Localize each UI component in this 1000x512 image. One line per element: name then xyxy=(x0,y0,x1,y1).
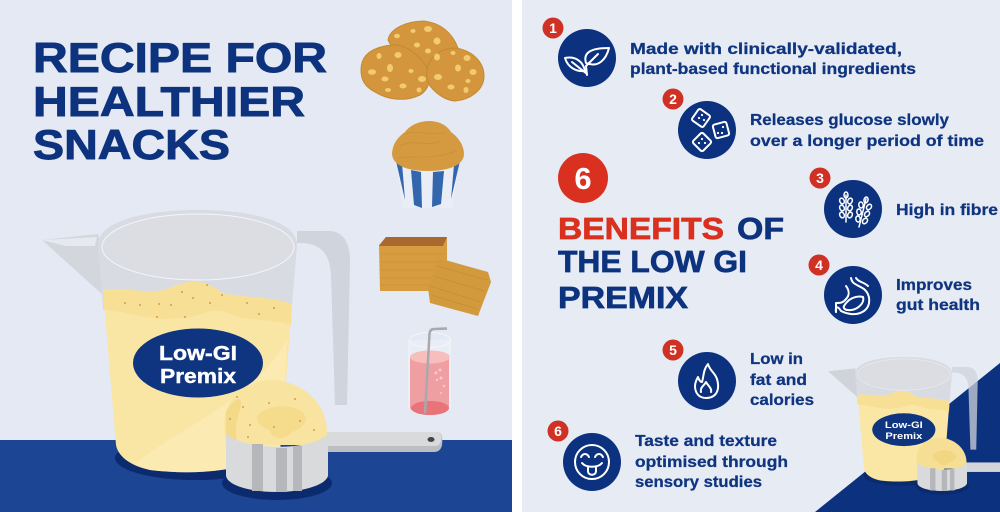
benefit 2: slow glucose release: 2 xyxy=(669,91,677,107)
icon: smiling face xyxy=(575,445,609,479)
benefit 4: gut health xyxy=(808,254,980,324)
small label: Low-GI Premix: Low-GI xyxy=(885,420,923,431)
benefit 2: slow glucose release: Releases glucose slowly xyxy=(750,112,949,129)
benefit 6: taste and texture: Taste and texture xyxy=(635,433,777,450)
small label: Low-GI Premix: Premix xyxy=(885,431,923,442)
benefit 5: low in fat and calories: Low in xyxy=(750,351,803,368)
benefit 1: plant-based ingredients: 1 xyxy=(549,20,557,36)
benefit 2: slow glucose release: over a longer period of time xyxy=(750,133,984,150)
heading: 6 benefits of the low GI premix: PREMIX xyxy=(558,280,688,315)
benefit 6: taste and texture: sensory studies xyxy=(635,474,762,491)
benefit 3: high in fibre: High in fibre xyxy=(896,202,998,219)
benefit 6: taste and texture: optimised through xyxy=(635,454,788,471)
icon: flame xyxy=(695,364,718,398)
benefit 6: taste and texture xyxy=(548,420,788,491)
benefit 1: plant-based ingredients xyxy=(542,18,916,87)
heading: 6 benefits of the low GI premix: OF xyxy=(737,211,784,246)
small jug with scoop xyxy=(828,357,1000,495)
panel: recipe for healthier snacks xyxy=(0,0,512,512)
benefit 3: high in fibre xyxy=(810,168,998,238)
icon: leaves xyxy=(565,48,609,75)
heading: 6 benefits of the low GI premix xyxy=(558,153,784,315)
benefit 4: gut health: gut health xyxy=(896,297,980,314)
benefit 5: low in fat and calories xyxy=(662,340,814,410)
benefit 2: slow glucose release xyxy=(662,88,984,159)
label: Low-GI Premix: Premix xyxy=(160,366,236,388)
icon: sugar cubes xyxy=(691,108,730,152)
title: RECIPE FOR xyxy=(33,34,327,81)
small label: Low-GI Premix xyxy=(872,413,935,446)
title: SNACKS xyxy=(33,121,230,168)
benefit 3: high in fibre: 3 xyxy=(816,170,824,186)
icon: cookies xyxy=(361,21,484,101)
icon: muffin xyxy=(392,121,464,208)
icon: stomach xyxy=(836,278,869,314)
label: Low-GI Premix xyxy=(133,328,263,398)
label: Low-GI Premix: Low-GI xyxy=(159,343,237,365)
icon: layered cake xyxy=(379,237,491,316)
benefit 5: low in fat and calories: 5 xyxy=(669,342,677,358)
title: HEALTHIER xyxy=(33,78,305,125)
benefit 6: taste and texture: 6 xyxy=(554,423,562,439)
icon: pink drink xyxy=(409,328,450,415)
heading: 6 benefits of the low GI premix: BENEFITS xyxy=(558,211,724,246)
title xyxy=(33,34,327,168)
benefit 1: plant-based ingredients: Made with clinically-validated, xyxy=(630,41,902,58)
benefit 5: low in fat and calories: calories xyxy=(750,392,814,409)
jug of premix with scoop xyxy=(42,210,442,500)
benefit 1: plant-based ingredients: plant-based functional ingredients xyxy=(630,61,916,78)
panel: benefits of the low GI premix xyxy=(522,0,1000,512)
heading: 6 benefits of the low GI premix: THE LOW GI xyxy=(558,244,747,279)
benefit 4: gut health: 4 xyxy=(815,257,823,273)
benefit 4: gut health: Improves xyxy=(896,277,972,294)
premix powder xyxy=(103,282,292,472)
benefit 5: low in fat and calories: fat and xyxy=(750,372,807,389)
icon: wheat xyxy=(839,192,873,227)
heading: 6 benefits of the low GI premix: 6 xyxy=(574,161,592,196)
